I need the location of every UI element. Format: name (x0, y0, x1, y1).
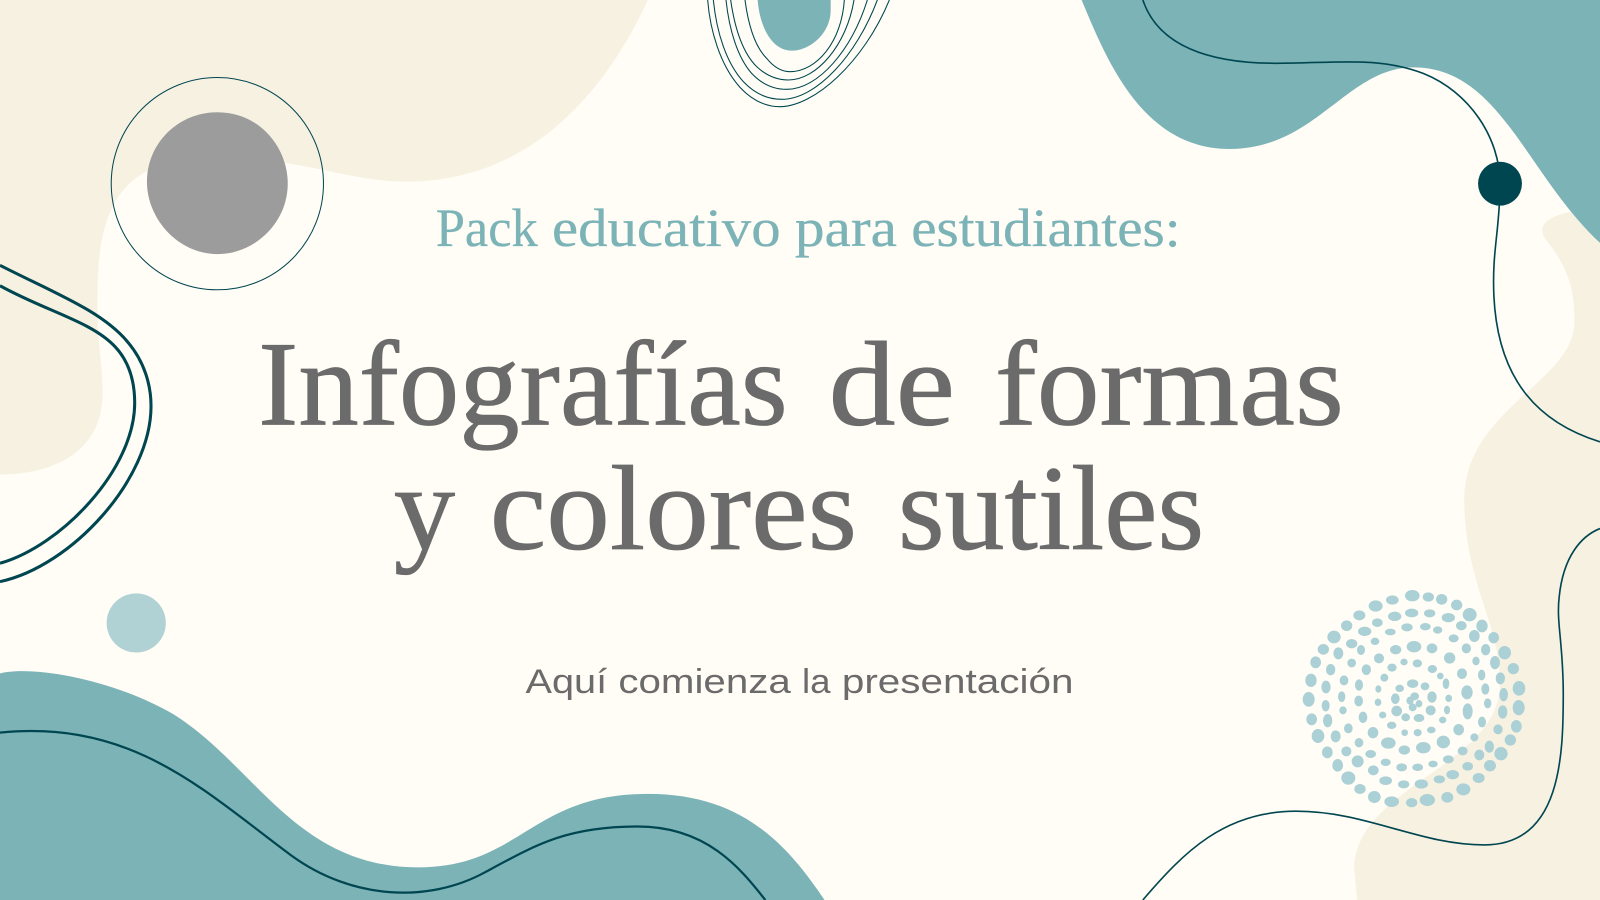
icon: ring with gray circle (111, 78, 323, 290)
subtitle (436, 198, 1181, 258)
icon: dark node (1478, 162, 1522, 206)
title line 2: sutiles (898, 443, 1204, 576)
tagline: Aquí (526, 663, 608, 701)
icon: dotted spiral (1303, 591, 1525, 807)
subtitle: estudiantes: (911, 198, 1181, 258)
title line 2: y (394, 443, 455, 576)
line: bottom left wave (0, 731, 765, 900)
title line 2 (394, 443, 1204, 576)
blob: beige top left (0, 0, 648, 474)
blob: beige right (1354, 209, 1600, 900)
blob: teal top right (1082, 0, 1600, 243)
blob: teal bottom left (0, 671, 824, 900)
tagline: comienza (618, 663, 792, 701)
icon: nested arcs with teal drop (708, 0, 889, 107)
icon: small light teal circle (107, 593, 166, 653)
title line 1 (258, 318, 1344, 451)
tagline (526, 663, 1073, 701)
tagline: la (802, 663, 831, 701)
title (258, 318, 1344, 576)
title line 1: Infografías (258, 318, 788, 451)
subtitle: educativo (552, 198, 781, 258)
subtitle: Pack (436, 198, 539, 258)
subtitle: para (795, 198, 897, 258)
line: left double wave (0, 265, 151, 582)
title line 2: colores (490, 443, 857, 576)
title line 1: de (829, 318, 955, 451)
tagline: presentación (842, 663, 1073, 701)
title line 1: formas (995, 318, 1344, 451)
line: lower right wave (1143, 529, 1600, 900)
line: top right wave with node (1143, 0, 1600, 442)
